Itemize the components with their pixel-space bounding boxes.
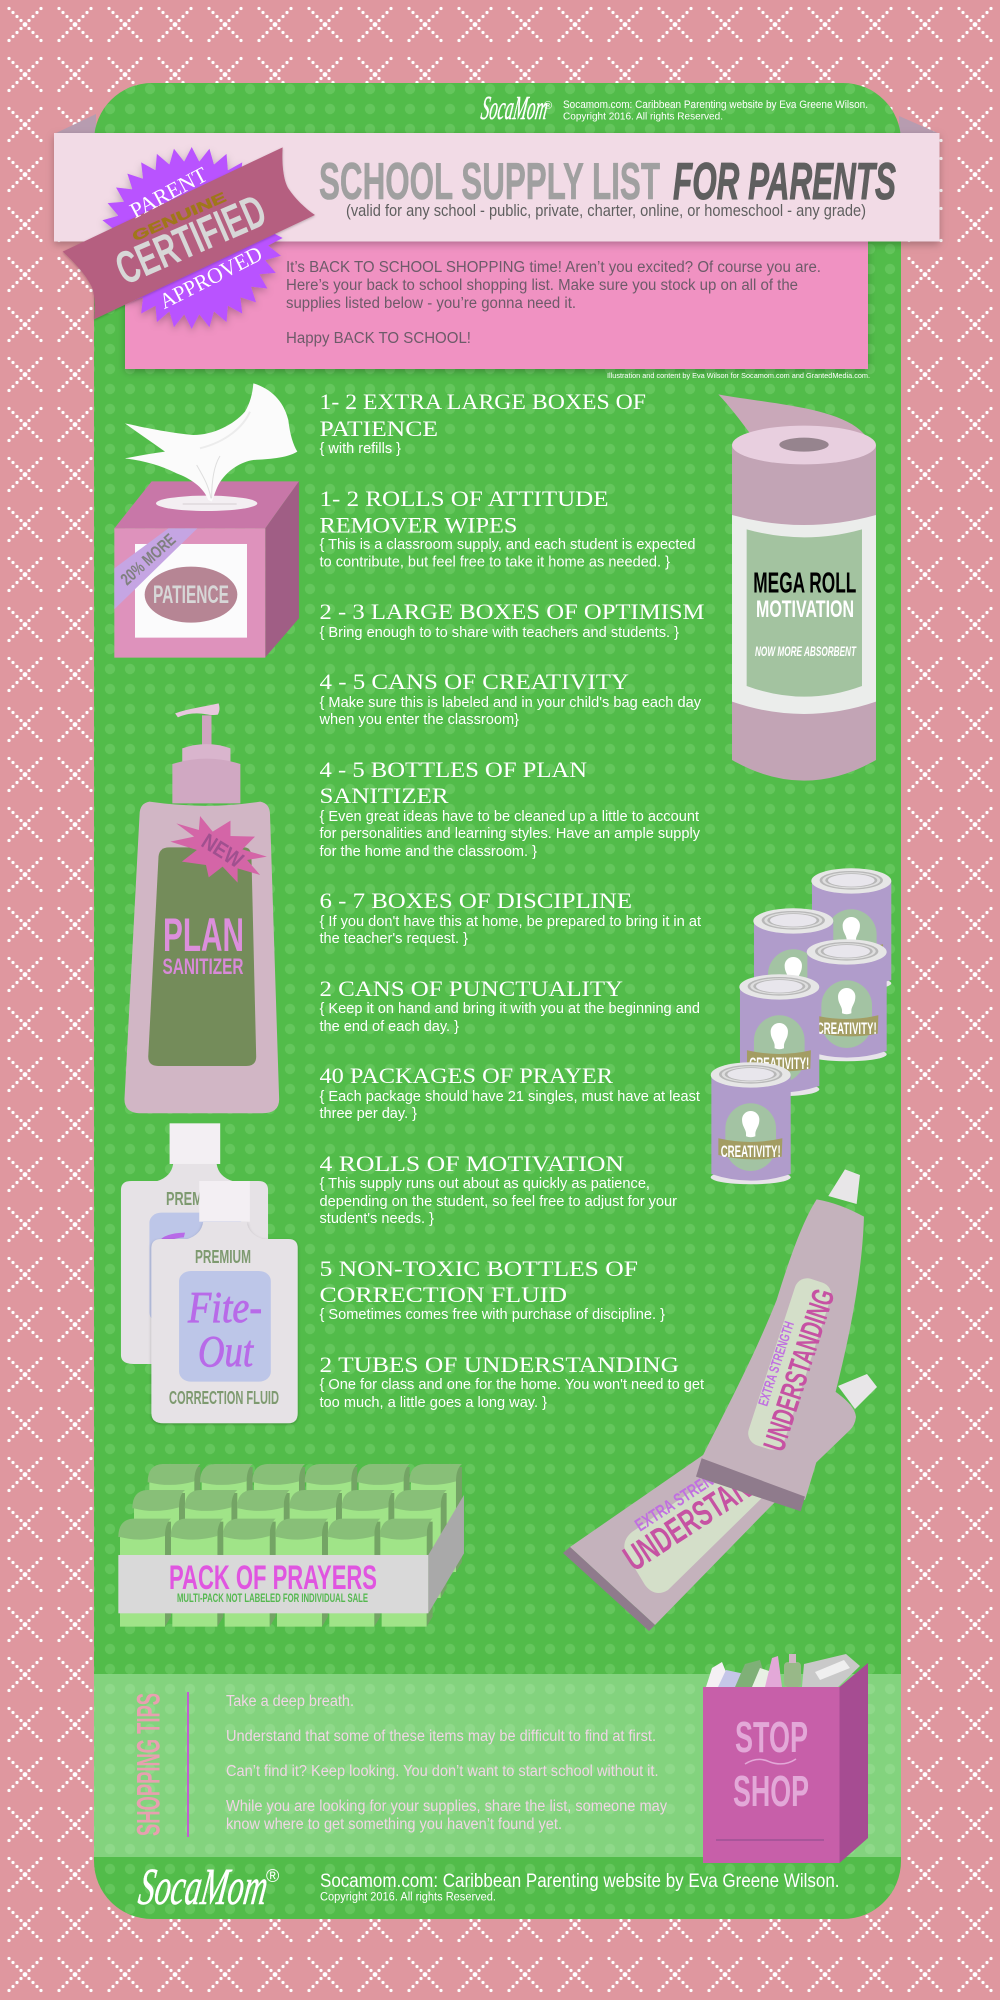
bag side bbox=[840, 1663, 868, 1863]
badge text: APPROVED: APPROVED bbox=[155, 241, 266, 314]
bag base fold bbox=[716, 1839, 824, 1841]
note: when you enter the classroom} bbox=[319, 711, 519, 728]
can 2 bbox=[753, 908, 833, 1030]
band fold flaps bbox=[54, 114, 940, 134]
item: optimism bbox=[320, 599, 704, 641]
tips text: Can’t find it? Keep looking. You don’t want to start school without it. bbox=[226, 1763, 658, 1780]
heading: REMOVER WIPES bbox=[320, 513, 518, 538]
heading: 2 - 3 LARGE BOXES OF OPTIMISM bbox=[320, 599, 704, 624]
note: { Even great ideas have to be cleaned up a little to account bbox=[320, 808, 700, 825]
intro pink box bbox=[125, 241, 868, 369]
item: prayer bbox=[320, 1063, 701, 1122]
heading bbox=[320, 757, 587, 808]
intro text bbox=[286, 259, 821, 347]
icon: tissue box of patience bbox=[114, 383, 299, 658]
bag flourish bbox=[745, 1759, 796, 1764]
icon: paper towel roll bbox=[718, 394, 876, 781]
heading: 6 - 7 BOXES OF DISCIPLINE bbox=[320, 888, 632, 913]
can 1 bbox=[811, 868, 891, 990]
note bbox=[320, 1000, 700, 1035]
ribbon text: GENUINE: GENUINE bbox=[130, 189, 228, 244]
icon: pack of prayers bbox=[118, 1464, 464, 1627]
can 5 bbox=[711, 1062, 791, 1184]
can 1: CREATIVITY! bbox=[821, 948, 881, 967]
item: patience bbox=[320, 389, 646, 457]
footer copyright: Copyright 2016. All rights Reserved. bbox=[320, 1892, 496, 1904]
label: MEGA ROLL: MEGA ROLL bbox=[753, 568, 856, 600]
heading: 4 - 5 BOTTLES OF PLAN bbox=[320, 757, 587, 782]
intro text: Here’s your back to school shopping list. Make sure you stock up on all of the bbox=[286, 277, 798, 294]
logo: SocaMom large: ® bbox=[266, 1866, 279, 1886]
item: attitude remover wipes bbox=[320, 486, 696, 571]
title: SCHOOL SUPPLY LIST bbox=[319, 153, 660, 211]
label: SANITIZER: SANITIZER bbox=[162, 954, 244, 979]
can 4 bbox=[739, 974, 819, 1096]
back bottle: PREMIUM bbox=[166, 1189, 226, 1209]
note: { One for class and one for the home. You won't need to get bbox=[320, 1376, 705, 1393]
note bbox=[319, 694, 701, 728]
back bottle bbox=[121, 1123, 268, 1364]
purple starburst bbox=[101, 147, 283, 329]
note: student's needs. } bbox=[320, 1210, 434, 1227]
icon: understanding tubes bbox=[563, 1169, 877, 1631]
footer bbox=[135, 1858, 840, 1916]
note: the teacher's request. } bbox=[320, 930, 468, 947]
can 3 bbox=[807, 939, 887, 1061]
note bbox=[320, 536, 696, 571]
heading: 4 ROLLS OF MOTIVATION bbox=[320, 1151, 624, 1176]
note: { Sometimes comes free with purchase of discipline. } bbox=[320, 1306, 665, 1323]
badge text: PARENT: PARENT bbox=[126, 161, 212, 223]
panel: shopping tips bbox=[94, 1674, 901, 1857]
illustration credit: Illustration and content by Eva Wilson for Socamom.com and GrantedMedia.com. bbox=[607, 371, 870, 380]
heading bbox=[320, 389, 646, 441]
label: multi-pack note: MULTI-PACK NOT LABELED FOR INDIVIDUAL SALE bbox=[177, 1593, 368, 1605]
green main panel bbox=[94, 83, 901, 1919]
item: creativity bbox=[319, 669, 701, 728]
logo: SocaMom small: SocaMom bbox=[479, 90, 550, 127]
ribbon text: CERTIFIED: CERTIFIED bbox=[108, 184, 273, 295]
item: motivation bbox=[320, 1151, 677, 1227]
label: MOTIVATION: MOTIVATION bbox=[756, 596, 854, 623]
label: PACK OF PRAYERS: PACK OF PRAYERS bbox=[169, 1559, 377, 1597]
icon: correction fluid bottles bbox=[121, 1123, 298, 1423]
tips text: Understand that some of these items may be difficult to find at first. bbox=[226, 1728, 656, 1745]
item: plan sanitizer bbox=[320, 757, 700, 860]
label: PATIENCE: PATIENCE bbox=[153, 581, 229, 609]
label: UNDERSTANDING: UNDERSTANDING bbox=[756, 1285, 842, 1455]
note: three per day. } bbox=[320, 1105, 417, 1122]
heading: CORRECTION FLUID bbox=[320, 1282, 567, 1307]
bag text: SHOP: SHOP bbox=[733, 1767, 809, 1816]
bag text: STOP: STOP bbox=[735, 1713, 808, 1762]
label: Fite-: Fite- bbox=[187, 1283, 262, 1332]
note bbox=[320, 913, 702, 947]
icon: stack of creativity cans bbox=[711, 868, 891, 1184]
icon: shopping bag bbox=[703, 1654, 868, 1863]
note: for the home and the classroom. } bbox=[320, 843, 537, 860]
heading: PATIENCE bbox=[320, 416, 438, 441]
label: PLAN: PLAN bbox=[163, 908, 244, 961]
top credit with logo bbox=[479, 90, 868, 127]
icon: plan sanitizer pump bottle bbox=[124, 703, 279, 1113]
tips text: Take a deep breath. bbox=[226, 1693, 354, 1710]
item: punctuality bbox=[320, 976, 700, 1035]
front bottle bbox=[151, 1181, 298, 1423]
credit text: Socamom.com: Caribbean Parenting website by Eva Greene Wilson. bbox=[563, 99, 868, 111]
heading: SHOPPING TIPS: SHOPPING TIPS bbox=[131, 1693, 167, 1836]
heading: 4 - 5 CANS OF CREATIVITY bbox=[320, 669, 629, 694]
note: too much, a little goes a long way. } bbox=[320, 1394, 547, 1411]
note bbox=[320, 808, 700, 860]
note: the end of each day. } bbox=[320, 1018, 459, 1035]
label: CORRECTION FLUID: CORRECTION FLUID bbox=[169, 1388, 279, 1408]
logo: SocaMom small: ® bbox=[544, 100, 552, 112]
back tube: UNDERSTANDING bbox=[616, 1435, 806, 1579]
divider line bbox=[187, 1692, 189, 1837]
note: depending on the student, so feel free to adjust for your bbox=[320, 1193, 677, 1210]
item: understanding bbox=[320, 1352, 705, 1411]
can 3: CREATIVITY! bbox=[817, 1019, 877, 1038]
note: { Bring enough to to share with teachers and students. } bbox=[320, 624, 679, 641]
note: to contribute, but feel free to take it home as needed. } bbox=[320, 554, 670, 571]
tips text bbox=[226, 1693, 667, 1833]
note: { This is a classroom supply, and each student is expected bbox=[320, 536, 696, 553]
intro text: It’s BACK TO SCHOOL SHOPPING time! Aren’t you excited? Of course you are. bbox=[286, 259, 821, 276]
label: EXTRA STRENGTH: EXTRA STRENGTH bbox=[755, 1319, 797, 1408]
bag front bbox=[703, 1687, 840, 1863]
ribbon bbox=[63, 147, 315, 319]
intro text: supplies listed below - you’re gonna need it. bbox=[286, 295, 576, 312]
note: { Keep it on hand and bring it with you at the beginning and bbox=[320, 1000, 700, 1017]
burst text: NEW: NEW bbox=[197, 828, 248, 873]
logo: SocaMom large: SocaMom bbox=[135, 1858, 272, 1916]
tips text: While you are looking for your supplies, share the list, someone may bbox=[226, 1798, 667, 1815]
credit text: Copyright 2016. All rights Reserved. bbox=[563, 110, 723, 122]
heading: 2 TUBES OF UNDERSTANDING bbox=[320, 1352, 679, 1377]
note: { Make sure this is labeled and in your child's bag each day bbox=[320, 694, 701, 711]
credit text bbox=[563, 99, 868, 122]
label: NOW MORE ABSORBENT: NOW MORE ABSORBENT bbox=[755, 643, 857, 659]
label: PREMIUM: PREMIUM bbox=[195, 1246, 251, 1267]
heading bbox=[320, 1256, 638, 1307]
heading: SANITIZER bbox=[320, 783, 449, 808]
note bbox=[320, 1175, 677, 1227]
note: { This supply runs out about as quickly as patience, bbox=[320, 1175, 650, 1192]
front tube bbox=[696, 1169, 864, 1511]
heading: 1- 2 EXTRA LARGE BOXES OF bbox=[320, 389, 646, 414]
heading bbox=[320, 486, 608, 538]
subtitle: (valid for any school - public, private, charter, online, or homeschool - any grade) bbox=[346, 201, 866, 220]
footer credit: Socamom.com: Caribbean Parenting website by Eva Greene Wilson. bbox=[320, 1871, 840, 1892]
note bbox=[320, 1376, 705, 1411]
supply list bbox=[319, 389, 705, 1411]
back tube bbox=[563, 1374, 877, 1631]
note bbox=[320, 1088, 701, 1122]
item: discipline bbox=[320, 888, 702, 947]
tips text: know where to get something you haven’t found yet. bbox=[226, 1816, 562, 1833]
bag contents bbox=[706, 1654, 860, 1687]
can 4: CREATIVITY! bbox=[749, 1054, 809, 1073]
intro text: Happy BACK TO SCHOOL! bbox=[286, 330, 471, 347]
label: Out: Out bbox=[198, 1327, 254, 1376]
heading: 1- 2 ROLLS OF ATTITUDE bbox=[320, 486, 608, 511]
heading: 5 NON-TOXIC BOTTLES OF bbox=[320, 1256, 638, 1281]
note: { with refills } bbox=[320, 440, 401, 457]
back tube: EXTRA STRENGTH bbox=[631, 1455, 739, 1535]
ribbon text: 20% MORE: 20% MORE bbox=[117, 530, 179, 589]
note: { Each package should have 21 singles, must have at least bbox=[320, 1088, 701, 1105]
note: for personalities and learning styles. Have an ample supply bbox=[320, 825, 700, 842]
note: { If you don't have this at home, be prepared to bring it in at bbox=[320, 913, 702, 930]
heading: 40 PACKAGES OF PRAYER bbox=[320, 1063, 613, 1088]
heading: 2 CANS OF PUNCTUALITY bbox=[320, 976, 623, 1001]
item: correction fluid bbox=[320, 1256, 665, 1323]
can 5: CREATIVITY! bbox=[721, 1142, 781, 1161]
title band bbox=[54, 133, 940, 242]
badge: certified bbox=[63, 147, 315, 329]
